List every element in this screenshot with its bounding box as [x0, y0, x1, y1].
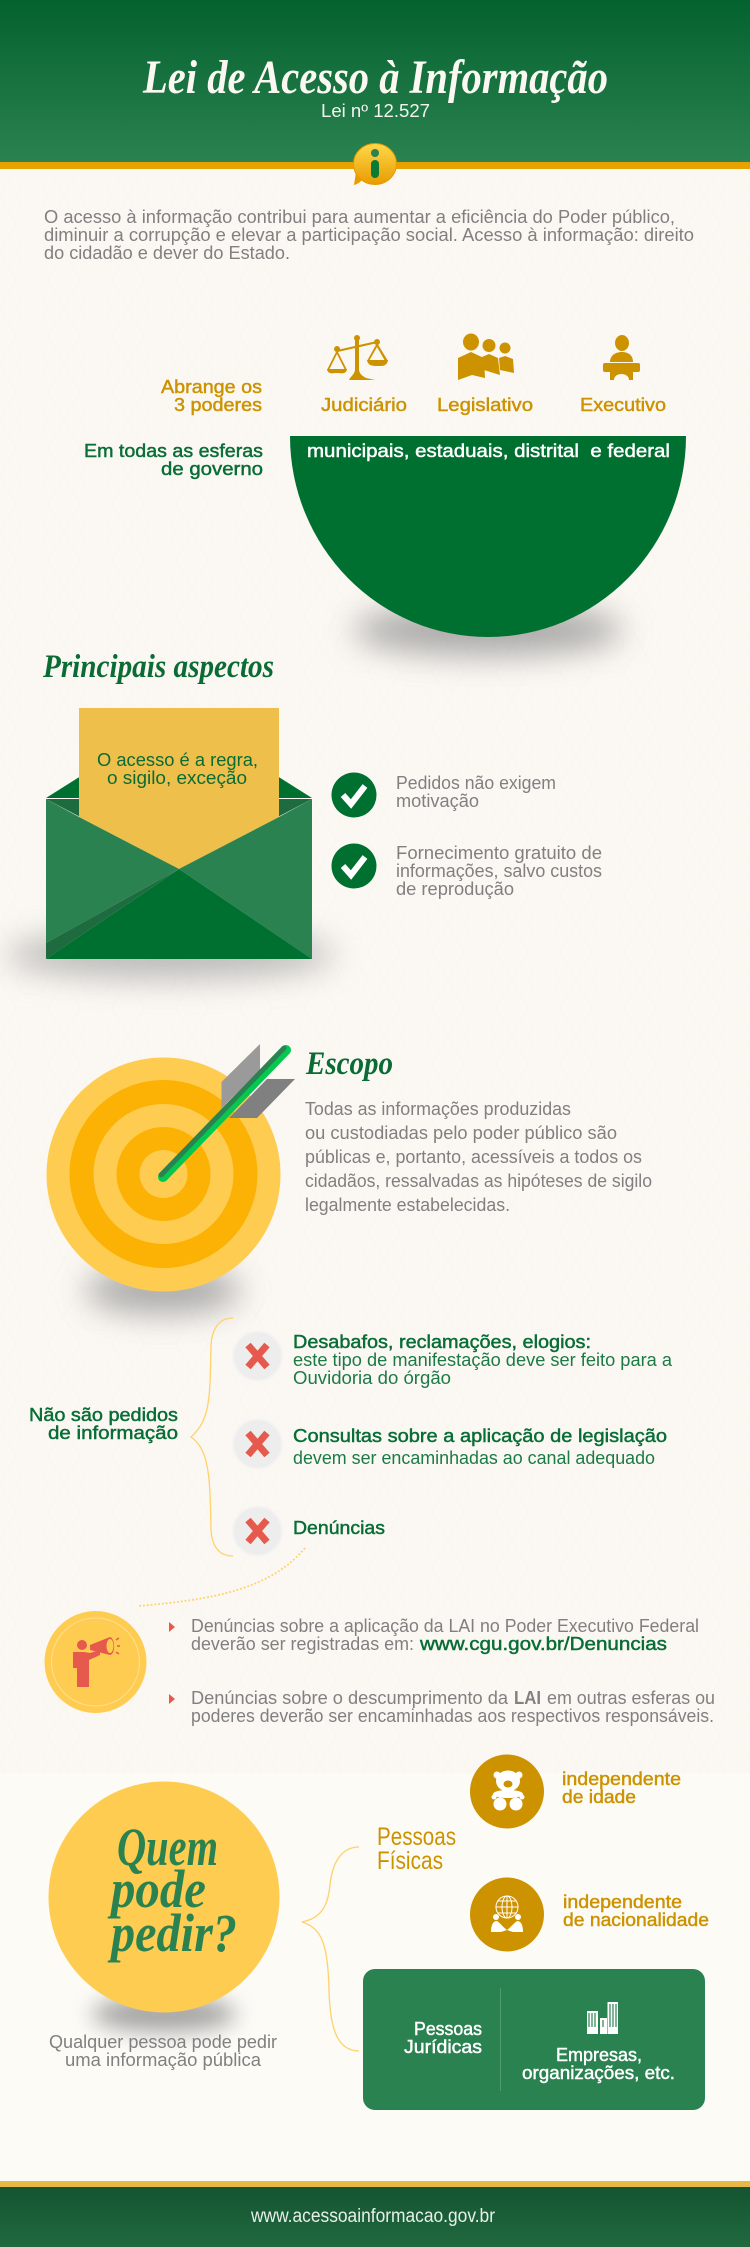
header band: [0, 0, 750, 169]
label: em todas as esferas de governo: de governo: [161, 459, 263, 479]
label: abrange os 3 poderes: 3 poderes: [174, 395, 262, 415]
heading: principais aspectos: Principais aspectos: [42, 649, 274, 685]
label: pessoas juridicas: [404, 2019, 482, 2057]
bullet text: outras esferas: poderes deverão ser encaminhadas aos respectivos responsáveis.: [191, 1706, 714, 1726]
text: escopo: Todas as informações produzidas: [305, 1099, 571, 1119]
icon: megaphone person: [44, 1611, 146, 1713]
bullet text: outras esferas: LAI: [514, 1688, 541, 1708]
label: empresas: [522, 2045, 675, 2083]
icon: scales: [327, 335, 388, 380]
icon: info speech bubble: [354, 144, 396, 185]
label: empresas: organizações, etc.: [522, 2063, 675, 2083]
label: executivo: Executivo: [580, 395, 666, 415]
label: abrange os 3 poderes: [161, 377, 262, 415]
bullet text: denuncias LAI executivo: [169, 1616, 699, 1654]
text: qualquer pessoa: [49, 2032, 277, 2070]
text: independente de nacionalidade: independente: [563, 1892, 682, 1912]
text: fornecimento: [396, 843, 602, 899]
text: denuncias: Denúncias: [293, 1518, 385, 1538]
circle: quem pode pedir: pedir?: [107, 1903, 237, 1963]
icon: globe with people: [470, 1878, 544, 1952]
circle: quem pode pedir: Quem: [117, 1817, 218, 1877]
text: desabafos: Ouvidoria do órgão: [293, 1368, 451, 1388]
label: em todas as esferas de governo: [84, 441, 263, 479]
footer: www.acessoainformacao.gov.br: [250, 2206, 496, 2227]
label: empresas: Empresas,: [556, 2045, 642, 2065]
label: nao sao pedidos de informacao: [29, 1405, 178, 1443]
text: escopo: ou custodiadas pelo poder público são: [305, 1123, 617, 1143]
icon: x 1: [233, 1332, 282, 1380]
intro text: diminuir a corrupção e elevar a participação social. Acesso à informação: direito: [44, 225, 694, 245]
bullet text: outras esferas: em outras esferas ou: [547, 1688, 715, 1708]
envelope with letter: [5, 708, 335, 979]
icon: buildings: [587, 2002, 618, 2034]
subtitle: Lei nº 12.527: [321, 101, 430, 121]
label: abrange os 3 poderes: Abrange os: [161, 377, 262, 397]
text: desabafos: Desabafos, reclamações, elogios:: [293, 1332, 591, 1352]
icon: x 2: [233, 1420, 282, 1468]
label: pessoas fisicas: Pessoas: [377, 1823, 456, 1851]
text: qualquer pessoa: Qualquer pessoa pode pedir: [49, 2032, 277, 2052]
text: fornecimento: de reprodução: [396, 879, 514, 899]
brace: nao sao pedidos: [191, 1318, 233, 1556]
brace: quem pode pedir: [302, 1847, 359, 2051]
text: consultas: Consultas sobre a aplicação de legislação: [293, 1426, 667, 1446]
target with arrow: [46, 1044, 295, 1314]
circle: quem pode pedir: pode: [107, 1859, 206, 1919]
label: judiciario: Judiciário: [321, 395, 407, 415]
label: pessoas fisicas: [377, 1823, 456, 1875]
intro text: do cidadão e dever do Estado.: [44, 243, 290, 263]
icon: legislative group: [458, 334, 514, 380]
text: pedidos: [396, 773, 556, 811]
text: desabafos: [293, 1332, 673, 1388]
icon: x 3: [233, 1506, 282, 1556]
envelope with letter: o sigilo, exceção: [107, 768, 247, 788]
text: independente de idade: [562, 1769, 681, 1807]
label: pessoas fisicas: Físicas: [377, 1847, 443, 1875]
circle: quem pode pedir: [48, 1782, 280, 2032]
text: desabafos: este tipo de manifestação deve ser feito para a: [293, 1350, 673, 1370]
label: pessoas juridicas: Pessoas: [414, 2019, 482, 2039]
footer: [0, 2181, 750, 2247]
icon: check 2: [332, 844, 376, 888]
bullet text: outras esferas: [169, 1688, 715, 1726]
half circle: spheres of government: [290, 436, 686, 656]
text: independente de nacionalidade: [563, 1892, 709, 1930]
icon: executive at podium: [603, 335, 640, 380]
label: nao sao pedidos de informacao: Não são pedidos: [29, 1405, 178, 1425]
intro text: [44, 207, 694, 263]
panel: pessoas juridicas: [363, 1969, 705, 2110]
label: em todas as esferas de governo: Em todas as esferas: [84, 441, 263, 461]
text: consultas: [293, 1426, 667, 1468]
text: independente de idade: independente: [562, 1769, 681, 1789]
dotted connector: [138, 1548, 305, 1606]
text: escopo: [305, 1099, 652, 1215]
intro text: O acesso à informação contribui para aumentar a eficiência do Poder público,: [44, 207, 675, 227]
text: consultas: devem ser encaminhadas ao canal adequado: [293, 1448, 655, 1468]
title: Lei de Acesso à Informação: [142, 51, 608, 104]
text: independente de nacionalidade: de nacionalidade: [563, 1910, 709, 1930]
label: pessoas juridicas: Jurídicas: [404, 2037, 482, 2057]
text: independente de idade: de idade: [562, 1787, 636, 1807]
text: fornecimento: informações, salvo custos: [396, 861, 602, 881]
text: escopo: cidadãos, ressalvadas as hipóteses de sigilo: [305, 1171, 652, 1191]
bullet text: outras esferas: Denúncias sobre o descumprimento da: [191, 1688, 509, 1708]
label: legislativo: Legislativo: [437, 395, 533, 415]
text: escopo: legalmente estabelecidas.: [305, 1195, 510, 1215]
text: pedidos: motivação: [396, 791, 479, 811]
text: qualquer pessoa: uma informação pública: [65, 2050, 262, 2070]
heading: escopo: Escopo: [305, 1046, 393, 1082]
envelope with letter: O acesso é a regra,: [97, 750, 258, 770]
label: nao sao pedidos de informacao: de informação: [48, 1423, 178, 1443]
text: fornecimento: Fornecimento gratuito de: [396, 843, 602, 863]
half circle: spheres of government: municipais, estaduais, distrital e federal: [307, 441, 670, 461]
bullet text: denuncias LAI executivo: deverão ser registradas em:: [191, 1634, 414, 1654]
text: pedidos: Pedidos não exigem: [396, 773, 556, 793]
bullet text: denuncias LAI executivo: www.cgu.gov.br/Denuncias: [419, 1634, 667, 1654]
text: escopo: públicas e, portanto, acessíveis a todos os: [305, 1147, 642, 1167]
icon: check 1: [332, 772, 376, 818]
icon: teddy bear: [470, 1754, 544, 1828]
bullet text: denuncias LAI executivo: Denúncias sobre a aplicação da LAI no Poder Executivo Federal: [191, 1616, 699, 1636]
